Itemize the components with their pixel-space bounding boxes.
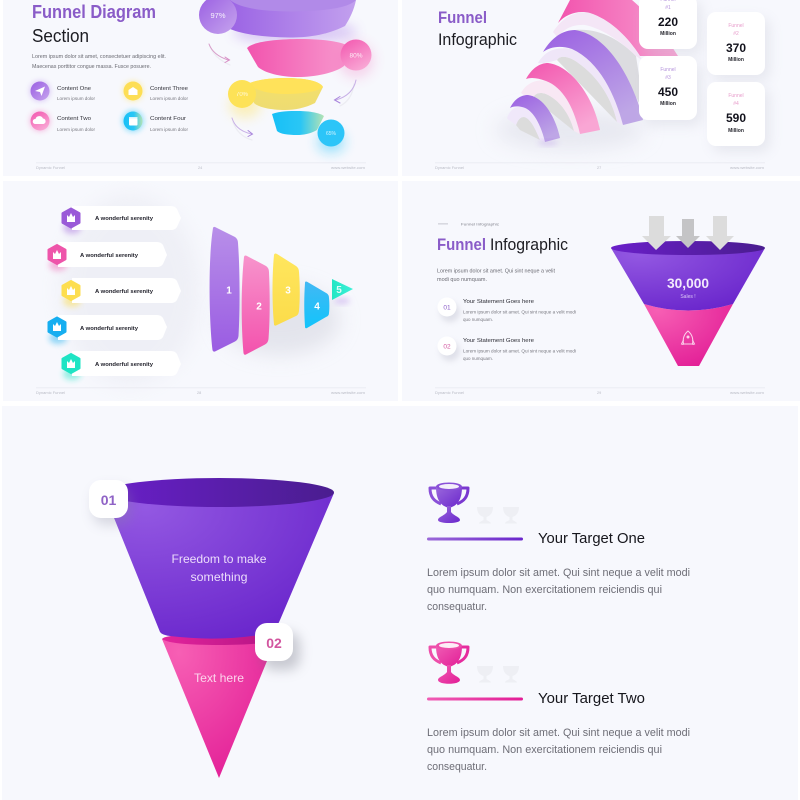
intro text — [437, 268, 556, 283]
footer: www.website.com — [730, 166, 764, 170]
target one — [427, 482, 690, 613]
legend: content items — [30, 81, 189, 132]
card: funnel 1: 220 — [658, 15, 678, 29]
heading: funnel infographic — [437, 235, 568, 254]
footer — [36, 388, 366, 395]
segment 2: 2 — [256, 302, 262, 312]
legend label: content one — [57, 86, 96, 101]
target one body — [427, 567, 690, 613]
card: funnel 3: #3 — [665, 75, 671, 81]
icon: paper plane — [30, 81, 50, 101]
statement 02: 02 — [443, 344, 451, 350]
funnel upper: purple: Freedom to make — [172, 552, 267, 566]
heading: funnel diagram section: Funnel Diagram — [32, 2, 156, 22]
heading: funnel infographic — [439, 11, 516, 48]
chart: 3D sliced funnel arcs — [495, 0, 678, 150]
target one body: quo numquam. Non exercitationem reiciendis qui — [427, 584, 662, 596]
statement 02: Lorem ipsum dolor sit amet. Qui sint neque a velit modi — [463, 348, 576, 354]
statement 01: Lorem ipsum dolor sit amet. Qui sint neque a velit modi — [463, 310, 576, 314]
legend label: content four: Content Four — [150, 116, 186, 122]
card: funnel 3: Million — [660, 101, 676, 107]
list item 5: A wonderful serenity — [95, 362, 154, 368]
arrow: centre — [676, 219, 700, 248]
funnel lower: pink — [162, 634, 276, 778]
card: funnel 2 — [707, 12, 770, 81]
footer: Dynamic Funnel — [36, 391, 65, 395]
panel: horizontal funnel with list — [36, 181, 366, 401]
funnel lower: pink: Text here — [194, 671, 244, 685]
intro text: Lorem ipsum dolor sit amet, consectetuer adipiscing elit. — [32, 54, 166, 60]
target two body — [427, 727, 690, 773]
funnel layer: pink 80% — [247, 39, 374, 78]
card: funnel 4: 590 — [726, 111, 746, 125]
kicker label: Funnel Infographic — [461, 222, 499, 226]
badge 01 — [89, 480, 131, 525]
footer — [435, 388, 765, 395]
panel: two stage funnel with targets — [2, 406, 798, 800]
funnel caption: Sales ! — [680, 294, 696, 300]
card: funnel 2: Funnel — [728, 23, 744, 29]
heading: funnel infographic: Infographic — [490, 235, 568, 254]
arrow: yellow to cyan — [232, 118, 252, 140]
heading: funnel infographic: Infographic — [438, 30, 517, 49]
arrow: purple to pink — [209, 44, 230, 65]
intro text — [32, 54, 166, 70]
legend label: content three: Lorem ipsum dolor — [150, 96, 189, 101]
arc 4: purple small — [507, 95, 560, 146]
segment 4 — [304, 281, 329, 328]
legend label: content one: Content One — [57, 86, 91, 92]
statement 02: Your Statement Goes here — [463, 338, 534, 344]
statement 01 — [438, 298, 576, 322]
target one body: consequatur. — [427, 601, 487, 613]
list item 2: A wonderful serenity — [80, 253, 139, 259]
list item 5 — [62, 351, 181, 380]
card: funnel 4: Funnel — [728, 93, 744, 99]
card: funnel 3: Funnel — [660, 67, 676, 73]
card: funnel 3 — [639, 56, 702, 126]
panel: funnel infographic with cards — [435, 0, 783, 170]
card: funnel 1: Million — [660, 31, 676, 37]
funnel layer: purple 97%: 97% — [210, 11, 226, 20]
target two title: Your Target Two — [538, 691, 645, 707]
card: funnel 2: Million — [728, 57, 744, 63]
chart: two stage funnel — [89, 478, 334, 778]
statement 01: quo numquam. — [463, 317, 493, 322]
funnel upper: purple — [104, 478, 334, 639]
list item 4 — [48, 315, 167, 344]
footer: Dynamic Funnel — [36, 166, 65, 170]
card: funnel 4: #4 — [733, 101, 739, 107]
funnel layer: purple 97% — [199, 0, 357, 44]
legend label: content two — [57, 116, 96, 132]
target two body: Lorem ipsum dolor sit amet. Qui sint neque a velit modi — [427, 727, 690, 739]
footer: 27 — [597, 166, 601, 170]
icon: faded trophies — [477, 666, 519, 682]
legend label: content one: Lorem ipsum dolor — [57, 96, 96, 101]
segment 1: 1 — [226, 286, 232, 296]
footer: www.website.com — [331, 166, 365, 170]
statement 02 — [438, 336, 576, 361]
segment 3 — [272, 253, 300, 326]
legend label: content two: Content Two — [57, 116, 91, 122]
footer: 24 — [198, 166, 202, 170]
heading: funnel diagram section: Section — [32, 26, 89, 46]
icon: pink trophy — [430, 642, 468, 684]
arrow: right — [706, 216, 734, 250]
statement 02: quo numquam. — [463, 356, 493, 361]
badge 01: 01 — [101, 492, 116, 508]
funnel layer: yellow 70% — [228, 78, 323, 118]
footer — [435, 162, 765, 170]
segment 3: 3 — [285, 286, 291, 296]
legend label: content four: Lorem ipsum dolor — [150, 127, 189, 132]
chart: funnel with arrows — [611, 216, 765, 366]
card: funnel 1: #1 — [665, 5, 671, 11]
list item 4: A wonderful serenity — [80, 326, 139, 332]
funnel rim — [611, 241, 765, 255]
heading: funnel infographic: Funnel — [438, 8, 487, 27]
intro text: modi quo numquam. — [437, 277, 487, 283]
footer: Dynamic Funnel — [435, 391, 464, 395]
arrow: left — [642, 216, 671, 250]
funnel lower: pink — [644, 304, 733, 366]
list item 1 — [62, 206, 181, 234]
icon: purple trophy — [430, 482, 468, 523]
segment 2 — [242, 255, 270, 355]
funnel upper: purple: something — [190, 570, 248, 584]
footer: www.website.com — [730, 391, 764, 395]
badge 02: 02 — [266, 635, 282, 651]
icon: calendar — [122, 110, 144, 132]
footer: Dynamic Funnel — [435, 166, 464, 170]
icon: faded trophies — [477, 507, 519, 524]
segment 5 — [332, 279, 353, 304]
footer: www.website.com — [331, 391, 365, 395]
statement 01: Your Statement Goes here — [463, 299, 534, 305]
statement 01: 01 — [443, 304, 451, 312]
card: funnel 4: Million — [728, 128, 744, 134]
kicker label — [438, 222, 499, 226]
heading: funnel diagram section — [32, 4, 155, 42]
arc 3: pink small — [521, 63, 600, 134]
legend label: content three: Content Three — [150, 86, 188, 92]
card: funnel 1 — [639, 0, 702, 55]
intro text: Lorem ipsum dolor sit amet. Qui sint neque a velit — [437, 268, 556, 274]
legend label: content two: Lorem ipsum dolor — [57, 127, 96, 132]
target one title: Your Target One — [538, 531, 645, 547]
progress line — [427, 538, 523, 540]
card: funnel 2: #2 — [733, 31, 739, 37]
card: funnel 2: 370 — [726, 41, 746, 55]
funnel value: 30,000 — [667, 276, 709, 291]
funnel layer: cyan 65%: 65% — [326, 131, 337, 137]
arc 1: pink large — [553, 0, 678, 102]
panel: funnel diagram section — [24, 0, 384, 170]
target two body: consequatur. — [427, 761, 487, 773]
list item 3 — [62, 278, 181, 307]
footer — [36, 162, 366, 170]
card: funnel 3: 450 — [658, 85, 678, 99]
footer: 28 — [197, 391, 201, 395]
funnel layer: pink 80%: 80% — [349, 52, 363, 60]
icon: cloud — [30, 111, 50, 131]
segment 5: 5 — [336, 285, 342, 296]
heading: funnel infographic: Funnel — [437, 235, 486, 254]
target one body: Lorem ipsum dolor sit amet. Qui sint neque a velit modi — [427, 567, 690, 579]
funnel layer: yellow 70%: 70% — [236, 92, 249, 98]
list item 2 — [48, 242, 167, 271]
legend label: content four — [150, 116, 189, 132]
funnel layer: cyan 65% — [272, 111, 345, 153]
footer: 29 — [597, 391, 601, 395]
badge 02 — [255, 623, 300, 670]
target two — [427, 642, 690, 773]
panel: funnel infographic sales — [402, 181, 800, 401]
funnel upper: purple — [611, 248, 765, 310]
chart: horizontal funnel segments — [210, 227, 353, 355]
progress line — [427, 698, 523, 700]
icon: rocket — [682, 331, 694, 344]
segment 4: 4 — [314, 302, 320, 312]
segment 1 — [210, 227, 240, 352]
icon: envelope — [123, 81, 143, 101]
list item 1: A wonderful serenity — [95, 216, 154, 222]
list item 3: A wonderful serenity — [95, 289, 154, 295]
card: funnel 4 — [707, 82, 770, 152]
intro text: Maecenas porttitor congue massa. Fusce posuere. — [32, 64, 151, 70]
target two body: quo numquam. Non exercitationem reiciendis qui — [427, 744, 662, 756]
arrow: pink to yellow — [334, 80, 356, 106]
arc 2: purple large — [538, 30, 643, 125]
legend label: content three — [150, 86, 189, 101]
